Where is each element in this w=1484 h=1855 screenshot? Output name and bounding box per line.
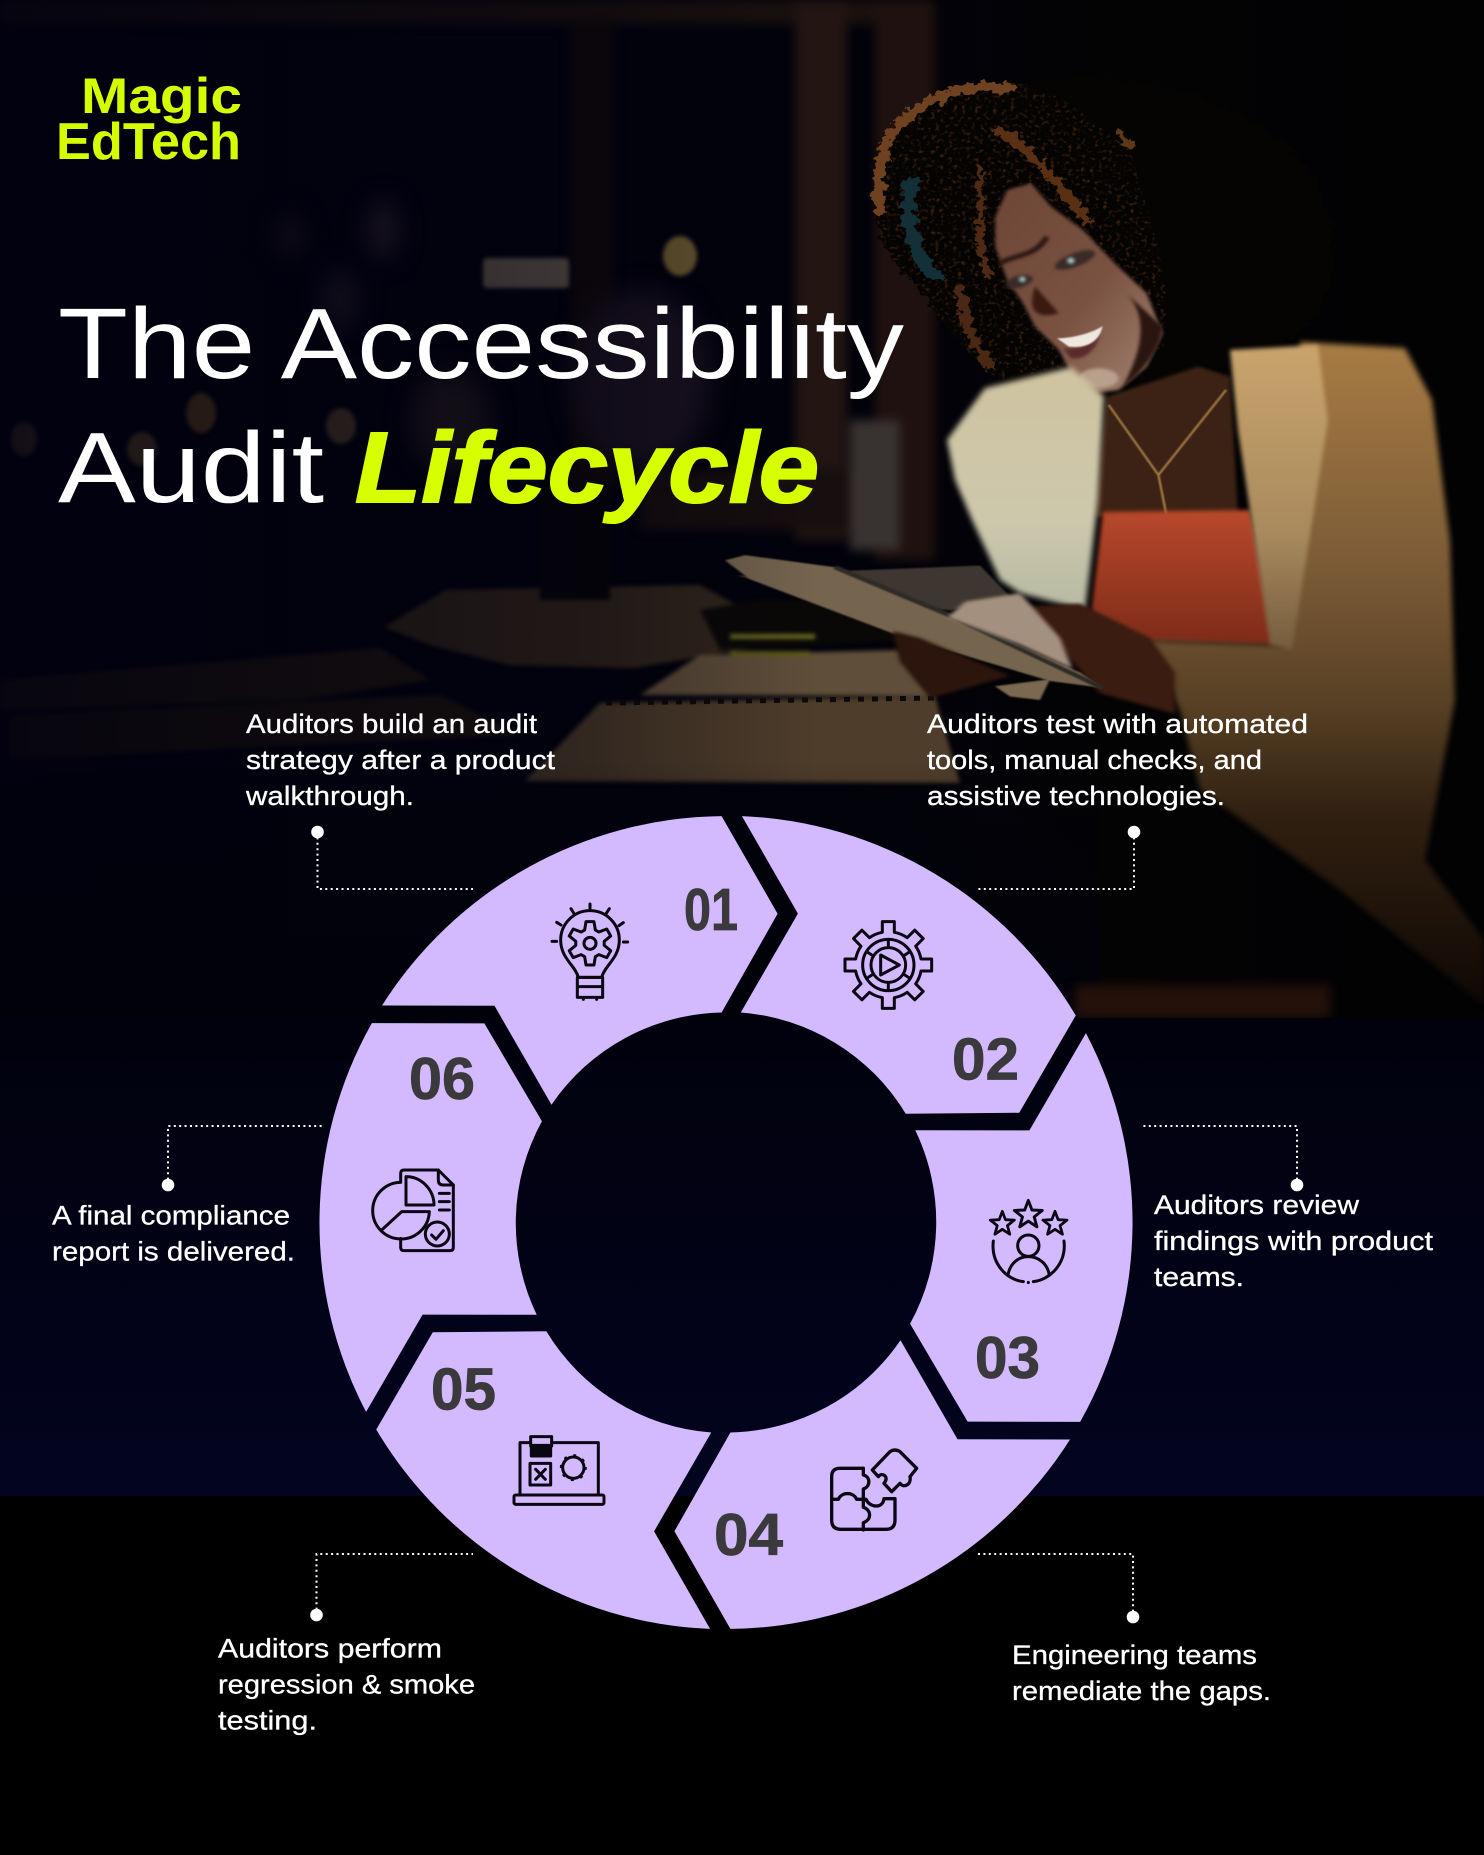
callout 06 text bbox=[52, 1200, 295, 1266]
callout 05 text: testing. bbox=[218, 1706, 317, 1736]
callout 02 text: assistive technologies. bbox=[927, 781, 1225, 811]
arm and hand bbox=[1025, 603, 1175, 714]
callout 01 text: walkthrough. bbox=[245, 781, 414, 811]
callout 05 text: Auditors perform bbox=[218, 1634, 442, 1664]
red top bbox=[1088, 510, 1277, 645]
number 01: 01 bbox=[684, 877, 738, 943]
connector 02 bbox=[978, 826, 1140, 889]
tablet bbox=[725, 555, 1102, 688]
woman head and hair, drawn in crop coordinates bbox=[876, 78, 1333, 517]
hair curl over lapel bbox=[1238, 360, 1247, 388]
callout 01 text: strategy after a product bbox=[246, 745, 556, 775]
tablet and hands, drawn in crop coordinates bbox=[725, 555, 1175, 714]
left hand bbox=[892, 631, 1010, 698]
callout 03 text: teams. bbox=[1154, 1262, 1244, 1292]
callout 02 text: Auditors test with automated bbox=[927, 709, 1308, 739]
face bbox=[995, 183, 1162, 393]
darkening overlays bbox=[0, 0, 770, 782]
fingers on screen bbox=[948, 593, 1072, 669]
number 02: 02 bbox=[952, 1026, 1019, 1092]
callout 06 text: report is delivered. bbox=[52, 1236, 295, 1266]
logo: Magic EdTech: Magic bbox=[81, 68, 242, 124]
segment 03 bbox=[802, 983, 1250, 1470]
title: Audit bbox=[58, 412, 324, 524]
number 06: 06 bbox=[409, 1046, 475, 1112]
segment 02 bbox=[656, 721, 1104, 1208]
callout 05 text bbox=[218, 1634, 475, 1736]
logo: Magic EdTech bbox=[56, 68, 242, 171]
white jacket panel bbox=[947, 367, 1104, 610]
segment 01 bbox=[382, 816, 778, 1105]
hair highlights bbox=[879, 87, 1131, 367]
lifecycle ring bbox=[202, 721, 1250, 1724]
callout 03 text: Auditors review bbox=[1154, 1190, 1360, 1220]
icon: light bulb with gear bbox=[552, 904, 628, 999]
background paper bbox=[738, 566, 1010, 610]
background photo: woman with tablet at night desk bbox=[0, 0, 1484, 1020]
segment 06 bbox=[202, 975, 650, 1462]
connector 06 bbox=[162, 1126, 323, 1191]
step numbers bbox=[409, 877, 1040, 1568]
lapel bbox=[1230, 345, 1328, 650]
connector 04 bbox=[978, 1554, 1139, 1623]
callout 01 text bbox=[245, 709, 556, 811]
callout 03 text bbox=[1154, 1190, 1434, 1292]
hair mass bbox=[874, 102, 936, 311]
callout 01 text: Auditors build an audit bbox=[246, 709, 538, 739]
tan coat body and sleeve bbox=[1145, 342, 1484, 1005]
facial features bbox=[999, 237, 1162, 388]
title: The Accessibility bbox=[58, 288, 904, 400]
callout 02 text: tools, manual checks, and bbox=[927, 745, 1262, 775]
title bbox=[58, 288, 904, 524]
logo: Magic EdTech: EdTech bbox=[56, 113, 241, 171]
connector 05 bbox=[310, 1554, 473, 1621]
number 04: 04 bbox=[714, 1502, 783, 1568]
tablet edge bbox=[835, 567, 1102, 688]
connector 03 bbox=[1142, 1126, 1303, 1191]
neck and chest bbox=[1095, 367, 1238, 517]
callout 04 text: Engineering teams bbox=[1012, 1640, 1257, 1670]
callout 04 text bbox=[1012, 1640, 1271, 1706]
callout 03 text: findings with product bbox=[1154, 1226, 1434, 1256]
window frame and columns bbox=[172, 0, 938, 562]
icon: person with three stars bbox=[990, 1200, 1067, 1283]
icon: laptop with test marks bbox=[514, 1437, 604, 1504]
callout 02 text bbox=[927, 709, 1308, 811]
callout 05 text: regression & smoke bbox=[218, 1670, 475, 1700]
segment 05 bbox=[348, 1237, 796, 1724]
connector 01 bbox=[311, 826, 473, 889]
warm strip at photo bottom bbox=[1075, 985, 1330, 1018]
desk papers bbox=[70, 584, 962, 786]
bokeh lights bbox=[11, 236, 697, 466]
icon: puzzle pieces bbox=[832, 1450, 917, 1530]
segment 04 bbox=[674, 1340, 1070, 1629]
hair curl texture bbox=[876, 83, 1167, 380]
teeth bbox=[1057, 326, 1103, 347]
title: Lifecycle bbox=[355, 412, 819, 524]
number 03: 03 bbox=[975, 1325, 1040, 1391]
number 05: 05 bbox=[431, 1356, 496, 1422]
callout 06 text: A final compliance bbox=[52, 1200, 290, 1230]
icon: gear with play button bbox=[845, 922, 932, 1008]
notebook spiral dots bbox=[606, 698, 935, 703]
callout 04 text: remediate the gaps. bbox=[1012, 1676, 1271, 1706]
necklace bbox=[1109, 390, 1226, 515]
icon: report with pie chart bbox=[373, 1170, 453, 1251]
lower cream cloth bbox=[995, 679, 1050, 700]
